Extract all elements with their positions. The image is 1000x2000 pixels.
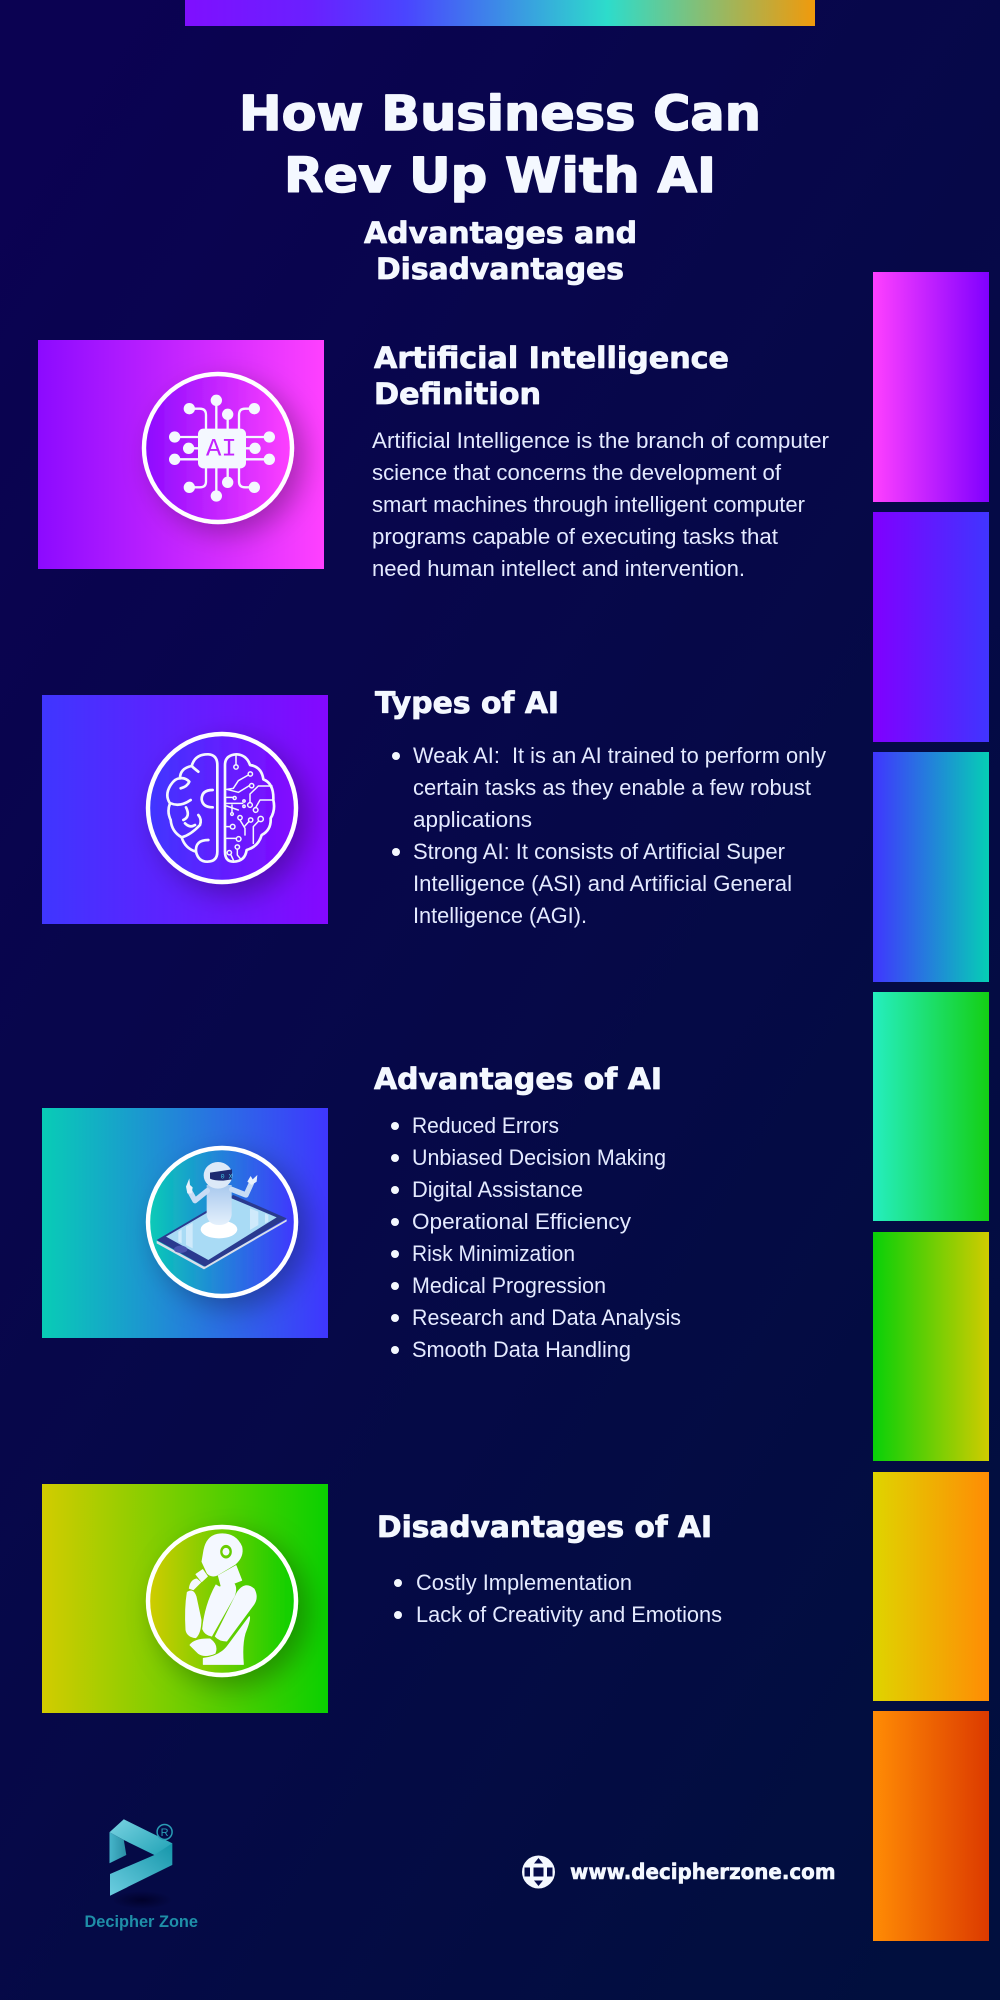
list: types of AI: Intelligence (AGI). [413,903,587,928]
icon: AI chip [169,395,275,502]
title: Rev Up With AI [284,148,716,204]
icon: robot on phone [157,1162,287,1269]
panel: types of AI image [42,695,328,924]
list: advantages of AI: Unbiased Decision Making [412,1145,666,1170]
list: advantages of AI: Medical Progression [412,1273,606,1298]
text block: definition: smart machines through intelligent computer [372,492,805,517]
list: types of AI: certain tasks as they enable a few robust [413,775,811,800]
right column of gradient bars [873,272,989,1941]
subtitle: Disadvantages [376,252,624,286]
list: types of AI: Intelligence (ASI) and Artificial General [413,871,792,896]
icon: AI chip: AI [206,435,237,464]
logo: Decipher Zone: Decipher Zone [84,1912,198,1931]
list: disadvantages of AI: Lack of Creativity and Emotions [416,1602,722,1627]
text block: definition: need human intellect and intervention. [372,556,745,581]
icon: thinking robot [186,1534,256,1664]
top gradient bar [185,0,815,26]
title [239,86,761,204]
list: advantages of AI [391,1113,681,1362]
icon: brain circuit [167,754,274,862]
text block: definition: science that concerns the development of [372,460,782,485]
logo: Decipher Zone: R [161,1827,169,1839]
heading: artificial intelligence definition [374,341,729,411]
panel: disadvantages image [42,1484,328,1713]
list: types of AI [392,743,826,928]
logo: Decipher Zone [84,1819,198,1931]
heading: artificial intelligence definition: Artificial Intelligence [374,341,729,375]
heading: types of AI: Types of AI [375,686,559,720]
list: advantages of AI: Digital Assistance [412,1177,583,1202]
list: disadvantages of AI [394,1570,722,1627]
text block: definition: programs capable of executing tasks that [372,524,778,549]
heading: disadvantages of AI: Disadvantages of AI [377,1510,712,1544]
website link: www.decipherzone.com [570,1860,836,1884]
list: advantages of AI: Smooth Data Handling [412,1337,631,1362]
panel: artificial intelligence image [38,340,324,569]
text block: definition: Artificial Intelligence is the branch of computer [372,428,829,453]
icon: globe [522,1856,555,1888]
list: advantages of AI: Research and Data Analysis [412,1305,681,1330]
list: advantages of AI: Risk Minimization [412,1241,575,1266]
panel: advantages image [42,1108,328,1338]
subtitle: Advantages and [364,216,637,250]
subtitle [364,216,637,286]
icon: robot on phone: 0 X [221,1172,233,1180]
heading: artificial intelligence definition: Definition [374,377,541,411]
heading: advantages of AI: Advantages of AI [374,1062,662,1096]
list: disadvantages of AI: Costly Implementation [416,1570,632,1595]
text block: definition [372,428,829,581]
list: types of AI: applications [413,807,532,832]
list: types of AI: Strong AI: It consists of Artificial Super [413,839,785,864]
list: advantages of AI: Reduced Errors [412,1113,559,1138]
list: types of AI: Weak AI: It is an AI trained to perform only [413,743,826,768]
title: How Business Can [239,86,761,142]
list: advantages of AI: Operational Efficiency [412,1209,631,1234]
